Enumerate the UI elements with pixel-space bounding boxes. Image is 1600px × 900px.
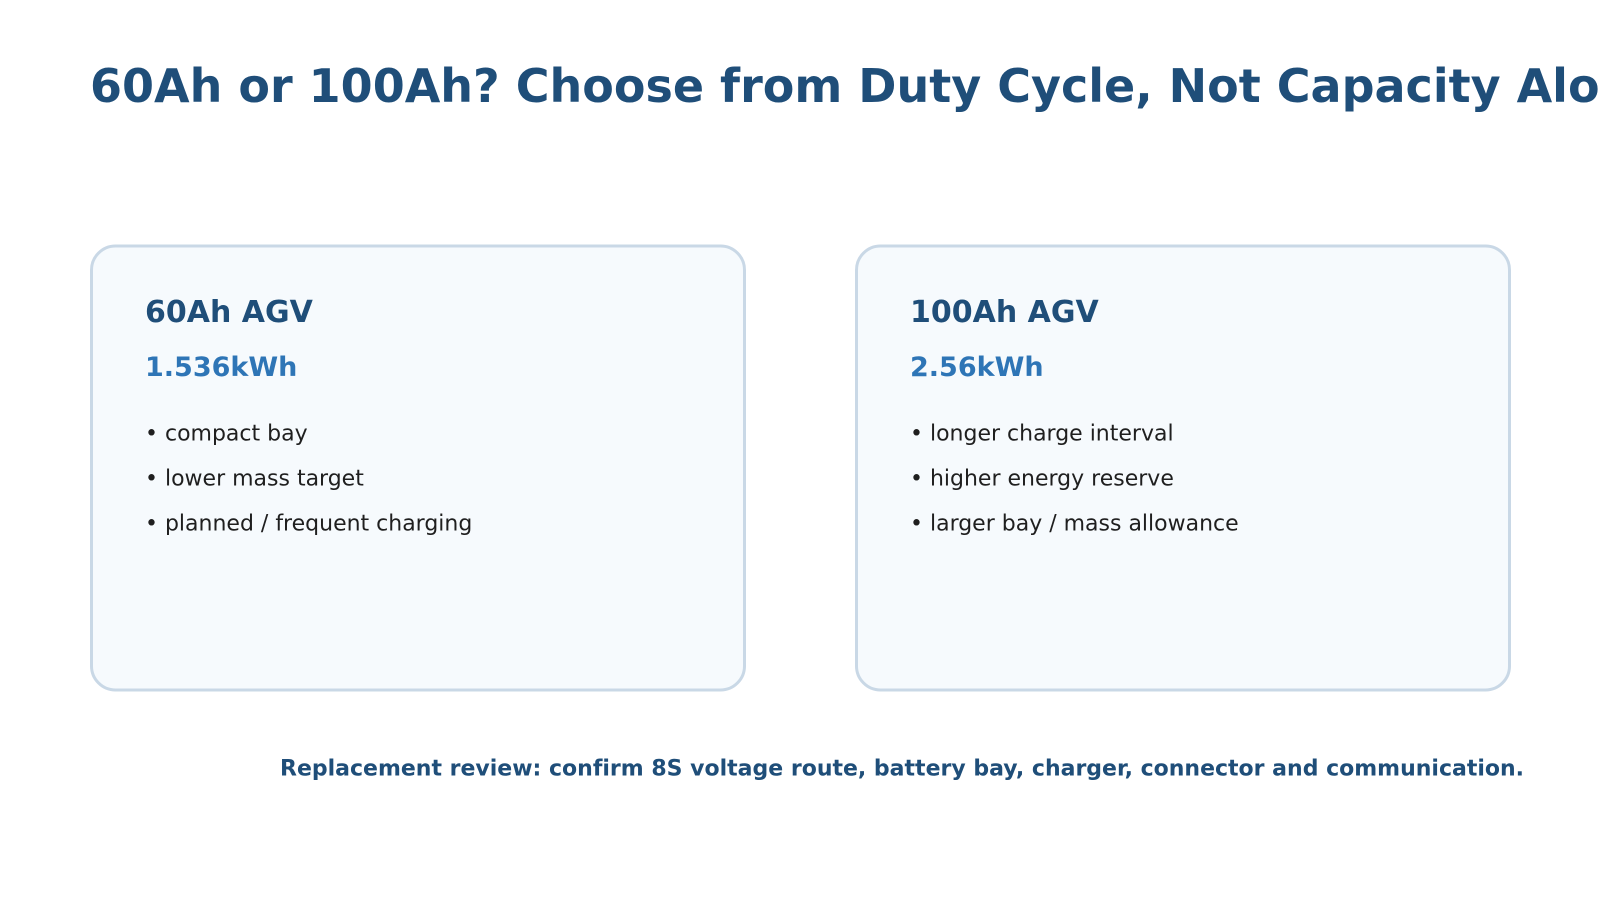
heading: 100Ah AGV: 100Ah AGV (910, 295, 1099, 330)
bullet list: • larger bay / mass allowance (910, 512, 1239, 536)
panel: 100Ah AGV (856, 246, 1510, 690)
footer note: Replacement review: confirm 8S voltage route, battery bay, charger, connector and communication. (280, 756, 1524, 782)
heading: 60Ah AGV: 60Ah AGV (145, 295, 314, 330)
bullet list (145, 422, 472, 536)
capacity: 2.56kWh: 2.56kWh (910, 352, 1044, 383)
bullet list: • compact bay (145, 422, 308, 446)
bullet list: • lower mass target (145, 466, 364, 492)
bullet list: • planned / frequent charging (145, 512, 472, 536)
bullet list (910, 422, 1239, 536)
panel: 60Ah AGV (92, 246, 744, 690)
capacity: 1.536kWh: 1.536kWh (145, 352, 297, 383)
bullet list: • longer charge interval (910, 422, 1174, 446)
bullet list: • higher energy reserve (910, 466, 1174, 492)
